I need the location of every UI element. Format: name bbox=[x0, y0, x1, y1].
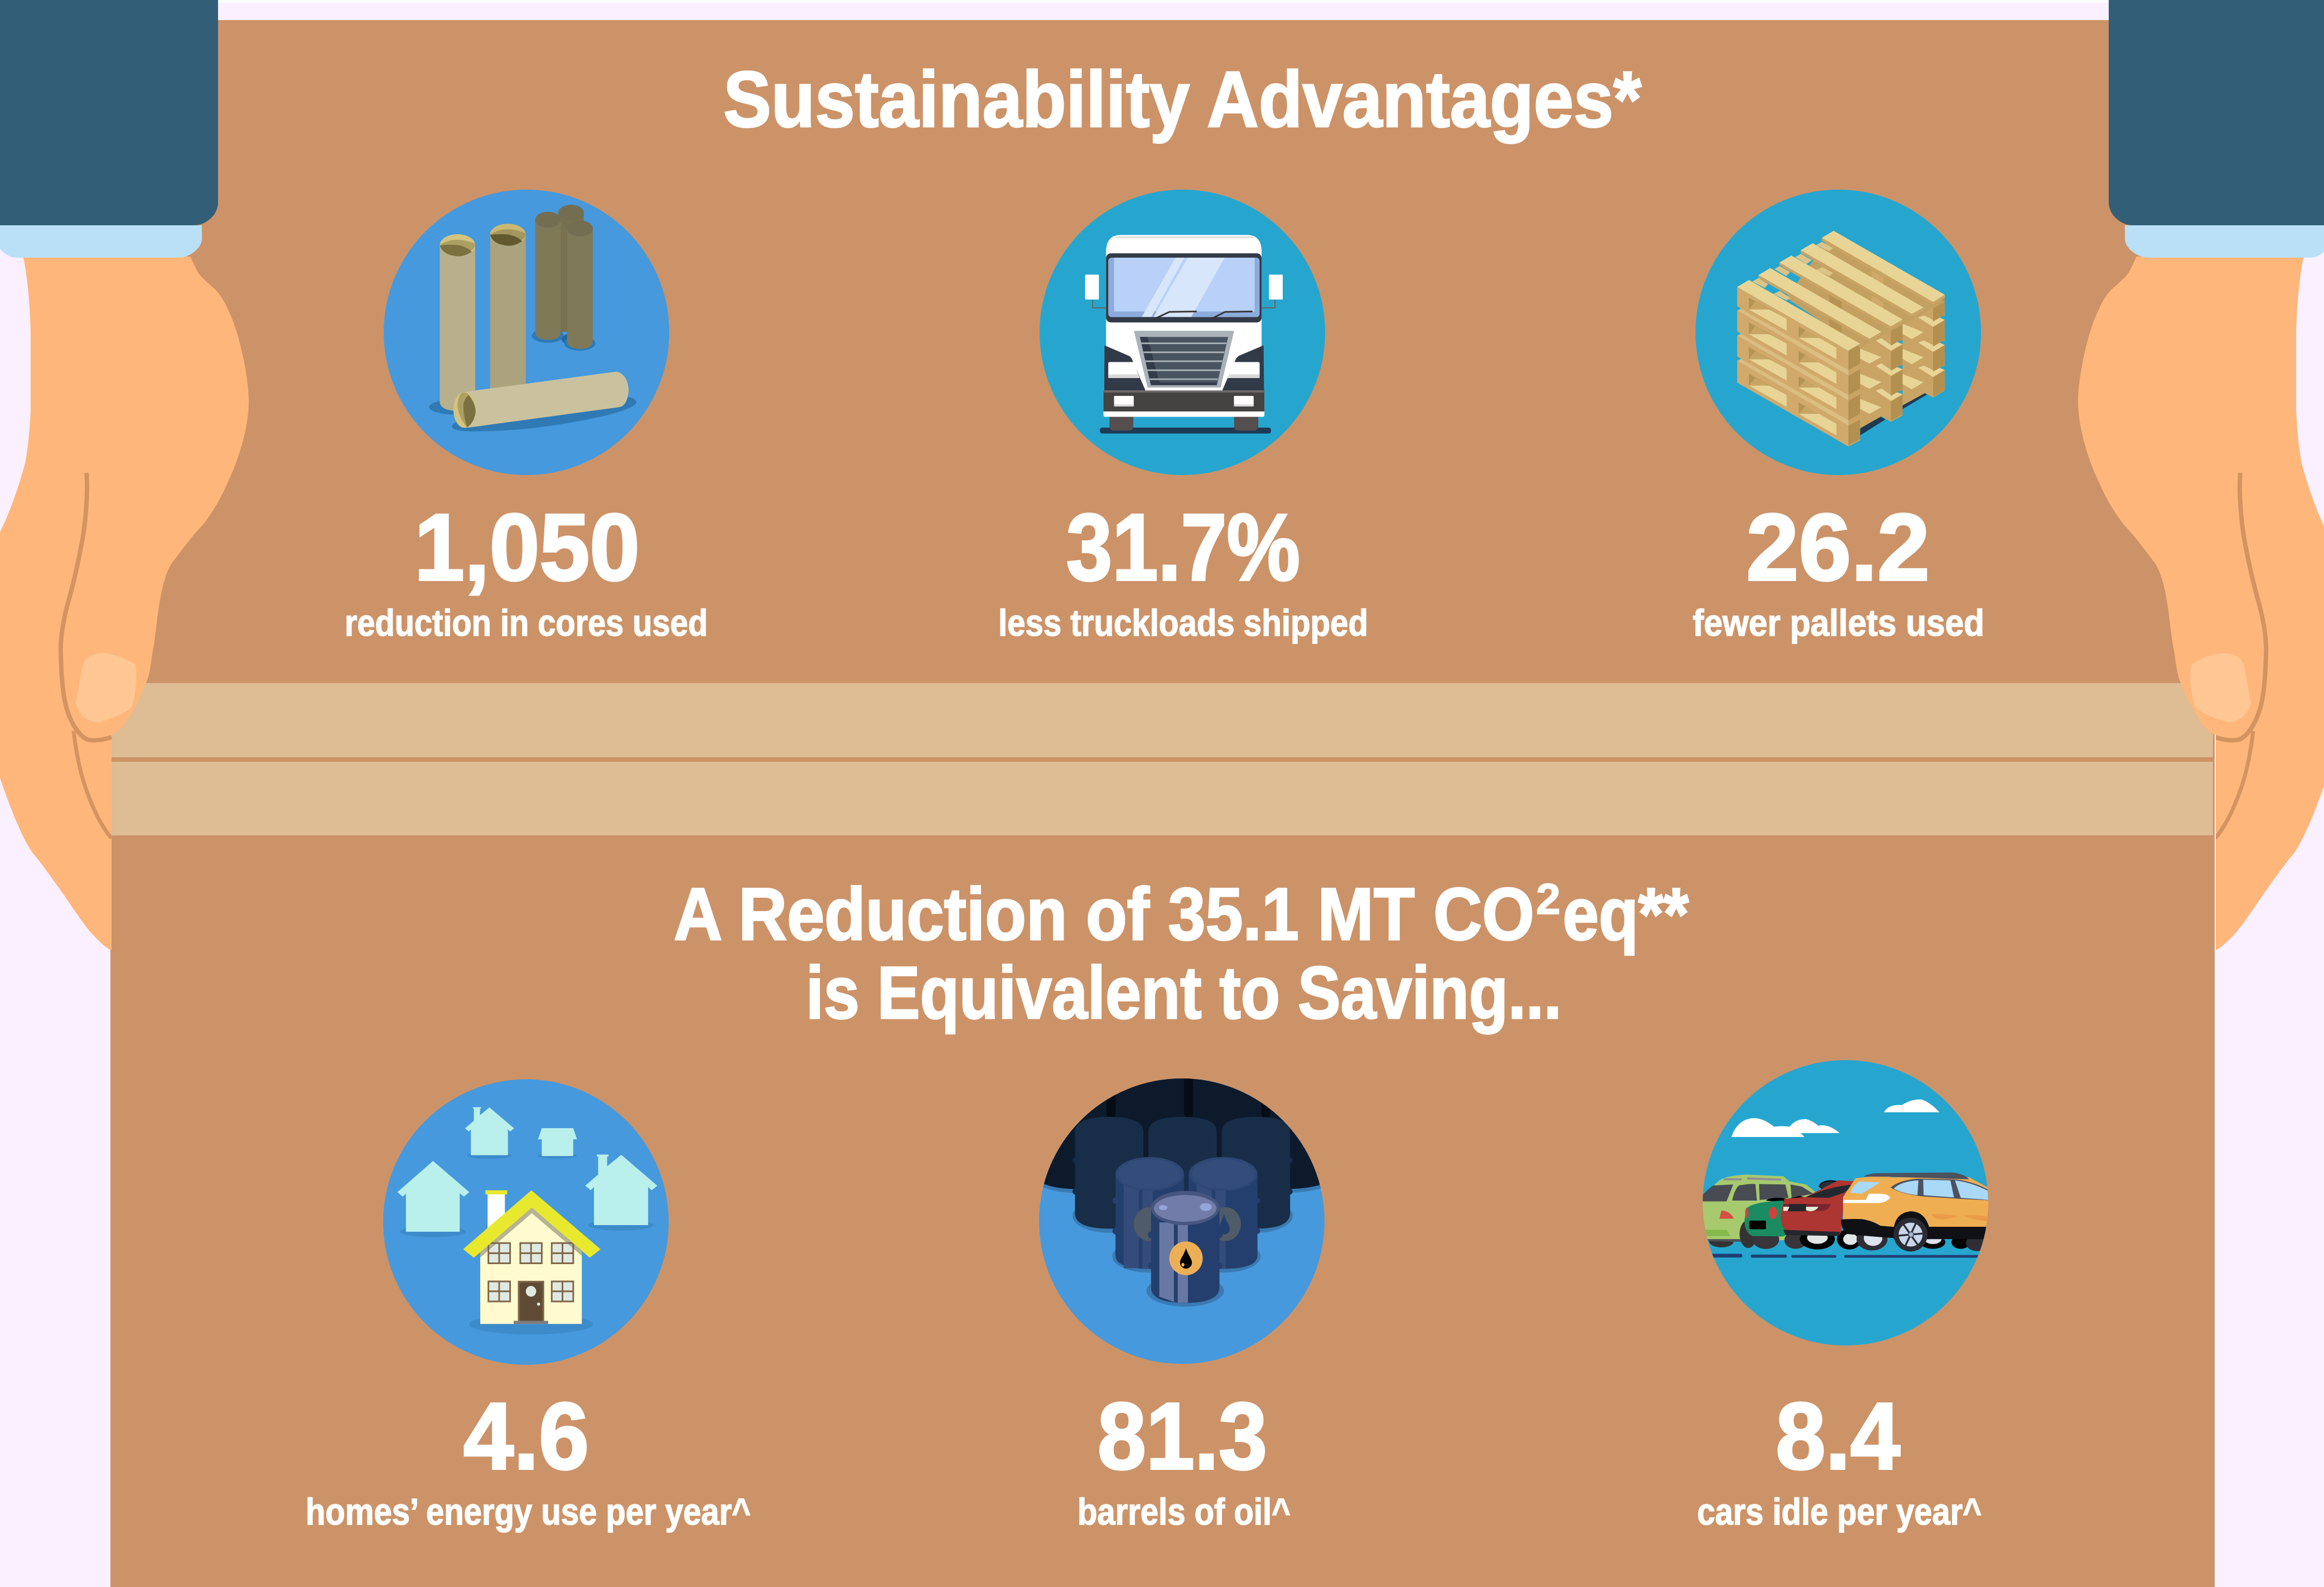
stat: truckloads: less truckloads shipped bbox=[998, 602, 1368, 644]
title: Sustainability Advantages: Sustainability Advantages* bbox=[723, 55, 1642, 144]
stat: cores: 1,050 bbox=[414, 495, 640, 601]
stat: homes: 4.6 bbox=[463, 1383, 589, 1489]
stat: truckloads: 31.7% bbox=[1066, 495, 1300, 601]
heading: CO2 reduction: A Reduction of 35.1 MT CO bbox=[674, 873, 1534, 956]
stat: cars idle: 8.4 bbox=[1776, 1383, 1900, 1489]
top white strip bbox=[0, 0, 2324, 3]
heading: CO2 reduction: eq** bbox=[1563, 873, 1689, 956]
icon: homes bbox=[383, 1080, 669, 1365]
icon: truck bbox=[1040, 190, 1325, 475]
icon: stacked pallets bbox=[1695, 190, 1981, 475]
stat: homes bbox=[306, 1383, 751, 1533]
right sleeve bbox=[2125, 225, 2324, 258]
stat: barrels of oil: 81.3 bbox=[1098, 1383, 1267, 1489]
stat: pallets: 26.2 bbox=[1746, 495, 1930, 601]
stat: pallets bbox=[1693, 495, 1984, 644]
left sleeve bbox=[0, 225, 202, 258]
box tape band bbox=[112, 683, 2213, 835]
left hand holding box bbox=[0, 0, 249, 950]
icon: cars idling bbox=[1697, 1060, 1994, 1346]
stat: truckloads bbox=[998, 495, 1368, 644]
icon: oil barrels bbox=[1038, 1059, 1326, 1364]
stat: barrels of oil: barrels of oil^ bbox=[1078, 1491, 1291, 1533]
stat: pallets: fewer pallets used bbox=[1693, 602, 1984, 644]
stat: cores bbox=[345, 495, 708, 644]
right hand holding box bbox=[2078, 0, 2324, 950]
icon: paper cores bbox=[384, 190, 669, 475]
stat: cars idle: cars idle per year^ bbox=[1697, 1491, 1982, 1533]
stat: cores: reduction in cores used bbox=[345, 602, 708, 644]
heading: CO2 reduction bbox=[674, 873, 1689, 1034]
stat: barrels of oil bbox=[1078, 1383, 1291, 1533]
heading: CO2 reduction: 2 bbox=[1536, 874, 1560, 923]
heading: CO2 reduction: is Equivalent to Saving... bbox=[806, 952, 1562, 1034]
stat: cars idle bbox=[1697, 1383, 1982, 1533]
stat: homes: homes’ energy use per year^ bbox=[306, 1491, 751, 1533]
